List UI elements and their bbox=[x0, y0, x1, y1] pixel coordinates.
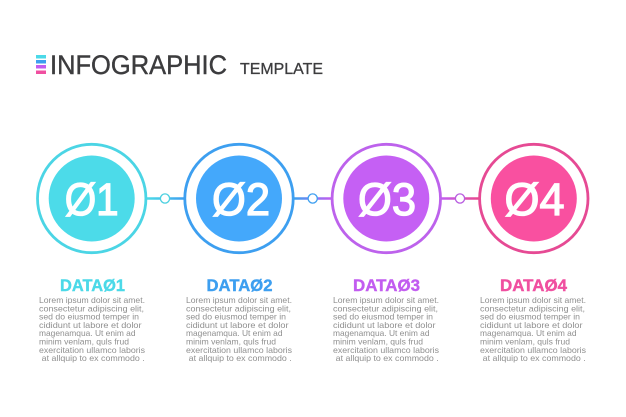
body text: exercitation ullamco laboris bbox=[480, 346, 586, 355]
body text: sed do eiusmod temper in bbox=[39, 313, 139, 322]
body text: consectetur adipiscing elit, bbox=[480, 304, 585, 313]
panel: data 01 bbox=[39, 277, 145, 363]
body text bbox=[39, 296, 145, 363]
circle 04: Ø4 bbox=[504, 174, 564, 225]
body text: Lorem ipsum dolor sit amet. bbox=[480, 296, 586, 305]
body text: at allquip to ex commodo . bbox=[336, 354, 439, 363]
body text: Lorem ipsum dolor sit amet. bbox=[333, 296, 439, 305]
body text: exercitation ullamco laboris bbox=[333, 346, 439, 355]
label: DATAØ3 bbox=[353, 277, 420, 295]
circle 04 bbox=[480, 144, 588, 253]
circle 01: Ø1 bbox=[65, 174, 119, 225]
connector 1 bbox=[146, 194, 185, 203]
body text: magenamqua. Ut enim ad bbox=[39, 329, 136, 338]
circle 01 bbox=[37, 144, 146, 253]
body text: at allquip to ex commodo . bbox=[483, 354, 586, 363]
body text: magenamqua. Ut enim ad bbox=[480, 329, 577, 338]
body text: magenamqua. Ut enim ad bbox=[186, 329, 283, 338]
label: DATAØ1 bbox=[60, 277, 125, 295]
body text: minim venlam, quls frud bbox=[480, 338, 570, 346]
panel: data 04 bbox=[480, 277, 586, 363]
body text bbox=[333, 296, 439, 363]
body text: minim venlam, quls frud bbox=[333, 338, 423, 346]
body text: minim venlam, quls frud bbox=[39, 338, 129, 346]
circle 02 bbox=[185, 144, 293, 253]
body text: exercitation ullamco laboris bbox=[39, 346, 145, 355]
body text: cididunt ut labore et dolor bbox=[480, 321, 583, 330]
label: DATAØ4 bbox=[500, 277, 568, 295]
body text: exercitation ullamco laboris bbox=[186, 346, 292, 355]
body text: minim venlam, quls frud bbox=[186, 338, 276, 346]
body text: at allquip to ex commodo . bbox=[189, 354, 292, 363]
body text bbox=[480, 296, 586, 363]
body text: sed do eiusmod temper in bbox=[333, 313, 433, 322]
panel: data 03 bbox=[333, 277, 439, 363]
title bbox=[36, 50, 323, 80]
circle 03 bbox=[332, 144, 440, 253]
body text: sed do eiusmod temper in bbox=[186, 313, 286, 322]
heading: template: TEMPLATE bbox=[240, 61, 323, 78]
body text: at allquip to ex commodo . bbox=[42, 354, 145, 363]
body text: consectetur adipiscing elit, bbox=[186, 304, 291, 313]
label: DATAØ2 bbox=[206, 277, 272, 295]
icon: striped bars bbox=[36, 55, 46, 74]
body text: cididunt ut labore et dolor bbox=[39, 321, 142, 330]
connector 2 bbox=[293, 194, 332, 203]
body text: magenamqua. Ut enim ad bbox=[333, 329, 430, 338]
circle 03: Ø3 bbox=[358, 174, 416, 225]
panel: data 02 bbox=[186, 277, 292, 363]
circle 02: Ø2 bbox=[212, 174, 270, 225]
body text: sed do eiusmod temper in bbox=[480, 313, 580, 322]
connector 3 bbox=[440, 194, 479, 203]
heading: infographic: INFOGRAPHIC bbox=[50, 50, 227, 80]
body text bbox=[186, 296, 292, 363]
body text: consectetur adipiscing elit, bbox=[333, 304, 438, 313]
body text: cididunt ut labore et dolor bbox=[333, 321, 436, 330]
body text: cididunt ut labore et dolor bbox=[186, 321, 289, 330]
body text: consectetur adipiscing elit, bbox=[39, 304, 144, 313]
body text: Lorem ipsum dolor sit amet. bbox=[186, 296, 292, 305]
body text: Lorem ipsum dolor sit amet. bbox=[39, 296, 145, 305]
